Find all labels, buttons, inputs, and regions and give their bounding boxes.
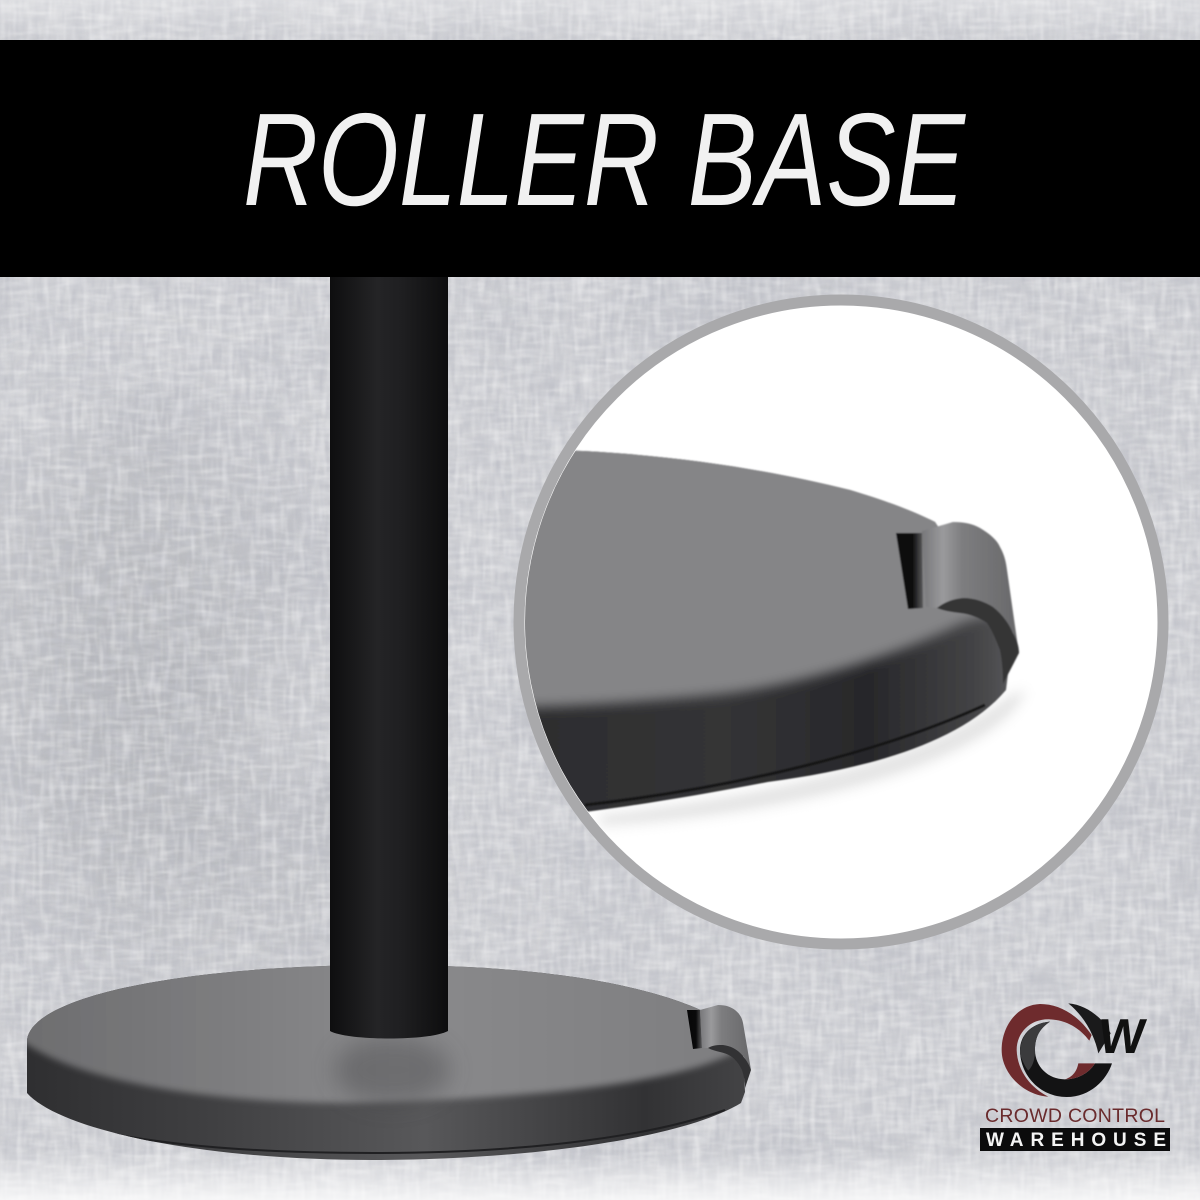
lens slot xyxy=(896,533,923,609)
stanchion: round base with post xyxy=(10,277,780,1165)
title text: ROLLER BASE xyxy=(243,86,967,233)
title banner xyxy=(0,40,1200,277)
logo mark xyxy=(1002,1003,1112,1097)
logo warehouse box xyxy=(980,1128,1170,1151)
lens floor shadow xyxy=(600,690,1026,826)
lens detail of base xyxy=(525,450,1024,828)
maroon wedge xyxy=(1065,1063,1095,1079)
lens base body xyxy=(525,450,1009,812)
post xyxy=(330,277,448,1038)
logo warehouse text: WAREHOUSE xyxy=(986,1130,1166,1151)
lens top face xyxy=(525,450,985,715)
black upper arc xyxy=(1068,1003,1111,1053)
maroon crescent xyxy=(1002,1004,1092,1097)
logo: Crowd Control Warehouse xyxy=(980,1003,1170,1151)
base body xyxy=(27,966,745,1160)
grey highlight xyxy=(1020,1022,1050,1071)
logo crowd control text: CROWD CONTROL xyxy=(985,1105,1165,1127)
lens roller tab xyxy=(922,522,1018,647)
zoom lens circle xyxy=(480,300,1163,944)
roller tab xyxy=(700,1005,751,1070)
base side wall xyxy=(20,960,755,1165)
roller slot xyxy=(687,1010,702,1049)
post contact shadow xyxy=(334,1036,450,1104)
roller tab end xyxy=(708,1045,751,1088)
lens base side xyxy=(534,450,1009,812)
lens base seam xyxy=(585,705,985,805)
logo W: W xyxy=(1096,1009,1149,1064)
black lower swoosh xyxy=(1020,1022,1112,1097)
lens roller end xyxy=(937,598,1019,684)
base top face xyxy=(27,966,740,1106)
base lower seam xyxy=(70,1110,725,1153)
